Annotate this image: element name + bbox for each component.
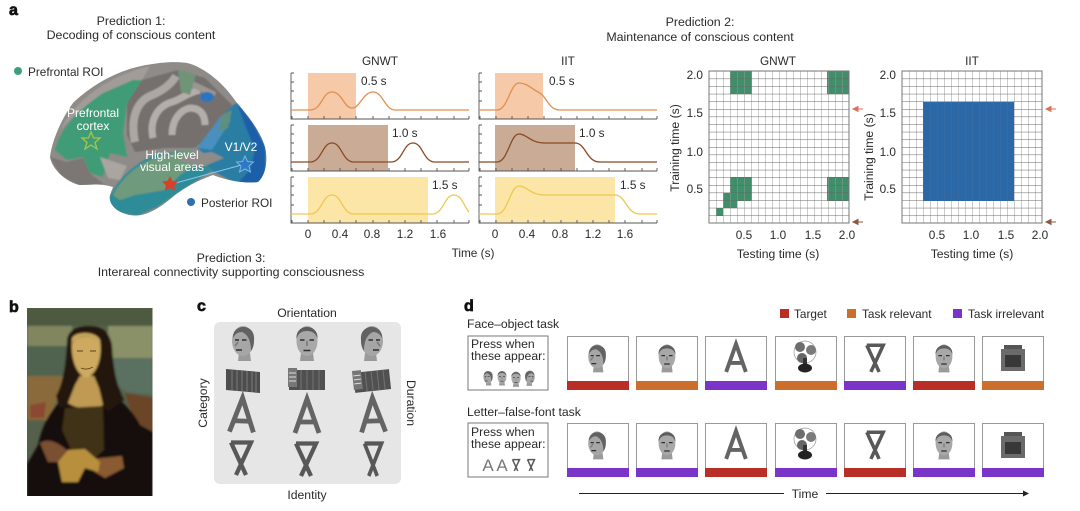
x axis labels — [492, 227, 634, 241]
legend: prefrontal ROI: Prefrontal ROI — [28, 65, 103, 79]
legend: posterior ROI: Posterior ROI — [201, 196, 272, 210]
heading: prediction 3 — [98, 251, 364, 279]
arrow: red — [1046, 106, 1056, 112]
row: false fonts — [231, 442, 382, 476]
row: 1.0 s: 1.0 s — [579, 126, 605, 140]
matrix: GNWT — [668, 54, 863, 261]
x tick labels — [929, 228, 1049, 242]
arrow: red — [853, 106, 863, 112]
star: high-level visual areas — [162, 176, 178, 191]
y tick labels: 2.0 — [880, 68, 896, 82]
x axis labels — [305, 227, 447, 241]
panel letter b: b — [9, 299, 19, 316]
frame 5 — [844, 424, 906, 477]
heading: prediction 2: Prediction 2: — [666, 15, 734, 29]
frame 1 — [567, 336, 629, 390]
frame 3 — [705, 336, 767, 390]
painting: Mona Lisa — [27, 308, 153, 500]
frontal band — [60, 66, 150, 130]
label: orientation: Orientation — [277, 306, 337, 320]
heading: prediction 1: Prediction 1: — [97, 14, 165, 28]
frame 7 — [982, 424, 1044, 477]
frame 4 — [775, 336, 837, 390]
temporal teal and olive — [108, 150, 213, 216]
row: faces — [232, 326, 383, 361]
y tick labels — [880, 68, 896, 196]
brain illustration — [45, 58, 270, 220]
row: 1.0 s: 1.0 s — [392, 126, 418, 140]
frame 1 — [567, 424, 629, 477]
legend: stimulus type: Target — [794, 307, 828, 321]
x axis labels: 1.6 — [430, 227, 447, 241]
panel letter d: d — [464, 298, 474, 315]
green frontal region — [55, 80, 142, 177]
label: duration: Duration — [404, 380, 418, 426]
y tick labels: 0.5 — [687, 182, 703, 196]
chart: IIT decoding — [479, 54, 657, 241]
chart: IIT decoding: IIT — [561, 54, 575, 68]
row: 1.5 s: 1.5 s — [620, 178, 646, 192]
chart: GNWT decoding — [291, 54, 469, 241]
y axis title: Training time (s) — [862, 113, 876, 201]
x axis labels: 0.8 — [364, 227, 381, 241]
instruction box: A — [482, 456, 494, 475]
label: identity: Identity — [287, 488, 328, 502]
row: 0.5 s: 0.5 s — [361, 74, 387, 88]
frame 6 — [913, 336, 975, 390]
arrow: brown — [853, 220, 863, 224]
brain labels: visual areas — [140, 160, 204, 174]
star: prefrontal cortex — [82, 132, 100, 149]
temporal gray — [100, 157, 127, 180]
matrix: IIT: IIT — [965, 54, 979, 68]
x tick labels — [736, 228, 856, 242]
star: V1/V2 — [236, 156, 254, 172]
task: face-object — [467, 317, 1044, 390]
x tick labels: 1.0 — [963, 228, 980, 242]
frame 2 — [636, 424, 698, 477]
y tick labels — [687, 68, 703, 196]
x axis labels: 1.6 — [617, 227, 634, 241]
panel: stimuli matrix — [214, 322, 401, 484]
heading: prediction 2 — [606, 15, 794, 44]
x axis labels: 0.4 — [519, 227, 536, 241]
brain labels: Prefrontal — [67, 106, 119, 120]
y tick labels: 2.0 — [687, 68, 703, 82]
grey folds — [127, 70, 232, 152]
task: face-object: Face–object task — [467, 317, 560, 331]
x axis labels: 0 — [305, 227, 312, 241]
panel letter c: c — [197, 298, 206, 315]
legend: stimulus type: Task relevant — [862, 307, 932, 321]
posterior blue — [197, 103, 266, 183]
heading: prediction 1 — [47, 14, 216, 42]
x axis title: Testing time (s) — [931, 247, 1013, 261]
x tick labels: 1.0 — [770, 228, 787, 242]
matrix: IIT — [862, 54, 1056, 261]
task: letter-false-font — [467, 405, 1044, 477]
connection line between stars — [172, 164, 245, 184]
x tick labels: 0.5 — [736, 228, 753, 242]
x axis labels: 1.2 — [397, 227, 413, 241]
y axis title: Training time (s) — [668, 104, 682, 192]
label: category: Category — [196, 377, 210, 428]
y tick labels: 1.0 — [687, 145, 703, 159]
legend: stimulus type — [780, 307, 1045, 321]
x axis title: Testing time (s) — [737, 247, 819, 261]
heading: prediction 1: Decoding of conscious content — [47, 28, 216, 42]
x tick labels: 2.0 — [1032, 228, 1049, 242]
heading: prediction 3: Prediction 3: — [197, 251, 265, 265]
heading: prediction 2: Maintenance of conscious content — [606, 30, 794, 44]
x tick labels: 1.5 — [998, 228, 1015, 242]
row: 1.0 s — [291, 125, 469, 171]
row: 1.0 s — [479, 125, 657, 171]
frame 4 — [775, 424, 837, 477]
task: letter-false-font: Letter–false-font task — [467, 405, 582, 419]
brain labels — [67, 106, 258, 174]
chart: GNWT decoding: GNWT — [362, 54, 398, 68]
instruction box: A — [496, 456, 508, 475]
row: 0.5 s: 0.5 s — [549, 74, 575, 88]
legend: stimulus type: Task irrelevant — [968, 307, 1045, 321]
row: 1.5 s — [291, 177, 469, 223]
x axis labels: 0 — [492, 227, 499, 241]
x axis title: time: Time (s) — [452, 246, 494, 260]
frame 3 — [705, 424, 767, 477]
row: accordions — [226, 367, 391, 393]
frame 6 — [913, 424, 975, 477]
y tick labels: 1.5 — [880, 106, 896, 120]
instruction box — [468, 423, 548, 477]
brain labels: V1/V2 — [225, 140, 258, 154]
instruction box — [468, 336, 548, 390]
instruction box: these appear: — [471, 349, 546, 363]
y tick labels: 0.5 — [880, 182, 896, 196]
instruction box: Press when — [471, 337, 535, 351]
row: 1.5 s — [479, 177, 657, 223]
brain labels: cortex — [77, 119, 109, 133]
x axis labels: 0.4 — [332, 227, 349, 241]
arrow: brown — [1046, 220, 1056, 224]
row: 1.5 s: 1.5 s — [432, 178, 458, 192]
panel letter a: a — [9, 2, 18, 19]
facial features — [77, 351, 96, 369]
x axis labels: 0.8 — [552, 227, 569, 241]
frame 5 — [844, 336, 906, 390]
y tick labels: 1.5 — [687, 106, 703, 120]
instruction box: these appear: — [471, 437, 546, 451]
row: 0.5 s — [479, 73, 657, 119]
heading: prediction 3: Interareal connectivity supporting consciousness — [98, 265, 364, 279]
x tick labels: 2.0 — [839, 228, 856, 242]
matrix: GNWT: GNWT — [760, 54, 796, 68]
y tick labels: 1.0 — [880, 145, 896, 159]
instruction box: Press when — [471, 425, 535, 439]
frame 7 — [982, 336, 1044, 390]
row: letter A — [229, 398, 386, 433]
brain labels: High-level — [145, 148, 199, 162]
x tick labels: 1.5 — [805, 228, 822, 242]
x axis labels: 1.2 — [585, 227, 601, 241]
arrow: time axis: Time — [792, 487, 819, 501]
row: 0.5 s — [291, 73, 469, 119]
x tick labels: 0.5 — [929, 228, 946, 242]
arrow: time axis — [579, 487, 1029, 501]
frame 2 — [636, 336, 698, 390]
